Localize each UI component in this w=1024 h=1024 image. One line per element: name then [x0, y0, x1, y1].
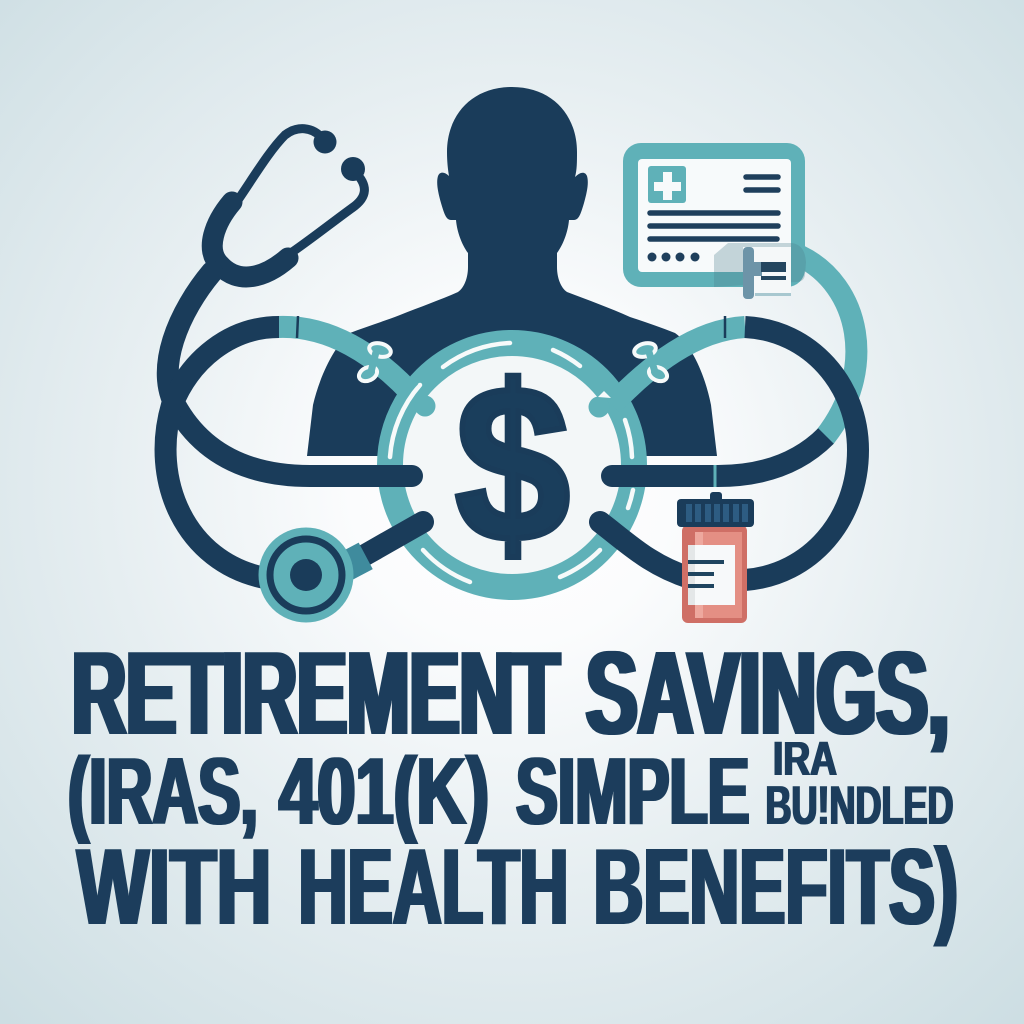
title text: SIMPLE [516, 738, 750, 845]
title text: IRA [773, 733, 837, 786]
teal tube segments and clamps [278, 316, 745, 418]
bottle cap ridges [686, 504, 748, 522]
dollar sign: $ [455, 340, 570, 588]
translucent clip [714, 243, 806, 299]
title text: WITH [77, 826, 272, 948]
earpieces [314, 130, 365, 181]
card dots [648, 252, 700, 262]
yoke [212, 202, 288, 277]
ring highlight dashes [390, 343, 633, 582]
dollar coin ring [390, 343, 634, 587]
title text: RETIREMENT [72, 627, 560, 760]
clamp right [633, 341, 669, 384]
stethoscope chest piece [258, 528, 373, 622]
card text lines [650, 177, 778, 239]
insurance card [623, 143, 806, 299]
ear tube right [288, 172, 364, 255]
stethoscope head and ear tubes [212, 129, 365, 277]
pill bottle [677, 492, 754, 623]
stethoscope tubing [166, 272, 858, 580]
teal tube right, behind card connector [800, 256, 856, 437]
title text [68, 627, 958, 948]
clamp left [357, 341, 392, 384]
bottle label [688, 545, 735, 605]
ear tube left [238, 129, 320, 200]
icon: medical cross [648, 166, 686, 203]
title text: HEALTH [298, 826, 568, 948]
person silhouette [307, 87, 717, 456]
title text: 401(K) [279, 738, 489, 845]
title text: (IRAS, [68, 738, 258, 845]
